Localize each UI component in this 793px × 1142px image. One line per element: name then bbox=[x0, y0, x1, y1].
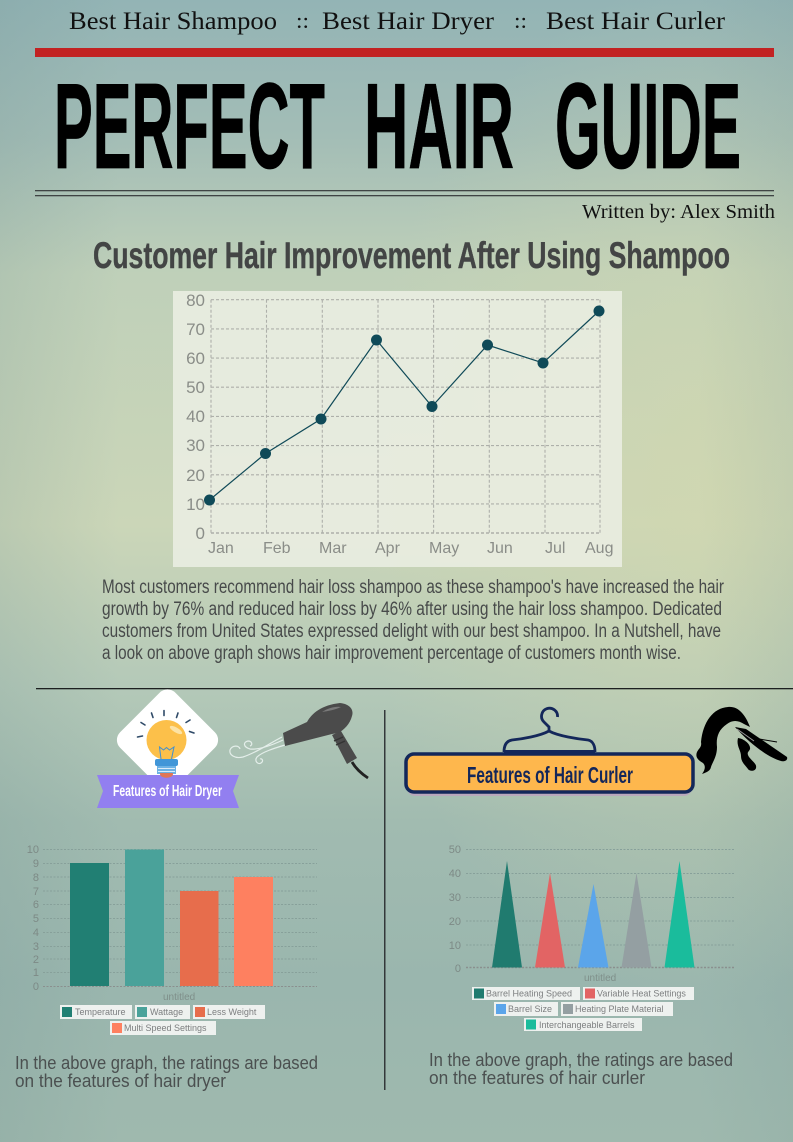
dryer y axis labels: 8 bbox=[33, 872, 39, 884]
ribbon: features of hair dryer bbox=[97, 775, 239, 808]
x axis labels: May bbox=[429, 540, 459, 557]
curler y axis labels: 40 bbox=[449, 868, 461, 880]
top navigation: Best Hair Shampoo bbox=[69, 8, 277, 35]
curler legend: Barrel Size bbox=[508, 1004, 552, 1014]
dryer y axis labels: 4 bbox=[33, 927, 39, 939]
dryer legend: Multi Speed Settings bbox=[124, 1023, 207, 1033]
x axis labels: Apr bbox=[375, 540, 401, 557]
x axis labels bbox=[208, 540, 613, 557]
dryer legend bbox=[60, 1005, 265, 1035]
curler triangles bbox=[492, 861, 694, 968]
curler y axis labels: 0 bbox=[455, 963, 461, 975]
curler legend: Barrel Heating Speed bbox=[486, 988, 572, 998]
main title: HAIR bbox=[364, 58, 514, 194]
dryer y axis labels: 9 bbox=[33, 858, 39, 870]
x axis labels: Jun bbox=[487, 540, 513, 557]
dryer y axis labels: 7 bbox=[33, 886, 39, 898]
dryer y axis labels: 1 bbox=[33, 967, 39, 979]
top navigation: Best Hair Curler bbox=[546, 8, 726, 35]
dryer legend: Temperature bbox=[75, 1007, 126, 1017]
byline: Written by: Alex Smith bbox=[582, 201, 775, 223]
dryer note bbox=[15, 1053, 318, 1091]
data points bbox=[204, 306, 604, 506]
y axis labels: 20 bbox=[186, 466, 205, 485]
icon: hair curler silhouette bbox=[696, 707, 787, 774]
dryer y axis labels: 3 bbox=[33, 941, 39, 953]
x axis labels: Mar bbox=[319, 540, 347, 557]
dryer legend: Wattage bbox=[150, 1007, 183, 1017]
curler legend bbox=[472, 987, 694, 1031]
dryer note: on the features of hair dryer bbox=[15, 1071, 226, 1091]
dryer y axis labels: 5 bbox=[33, 913, 39, 925]
curler legend: Interchangeable Barrels bbox=[539, 1020, 635, 1030]
curler axis title: untitled bbox=[584, 973, 616, 984]
dryer y axis labels bbox=[27, 844, 39, 993]
dryer y axis labels: 2 bbox=[33, 954, 39, 966]
dryer y axis labels: 6 bbox=[33, 899, 39, 911]
ribbon: features of hair dryer: Features of Hair Dryer bbox=[113, 783, 222, 800]
chart gridlines bbox=[211, 300, 600, 533]
dryer gridlines bbox=[43, 850, 317, 986]
x axis labels: Jul bbox=[545, 540, 565, 557]
badge backing diamond bbox=[112, 685, 223, 795]
dryer axis title: untitled bbox=[163, 992, 195, 1003]
curler y axis labels: 50 bbox=[449, 844, 461, 856]
bar chart: hair dryer bbox=[27, 844, 317, 1035]
main title: PERFECT bbox=[54, 58, 325, 194]
y axis labels bbox=[186, 291, 205, 543]
y axis labels: 60 bbox=[186, 349, 205, 368]
dryer bars bbox=[70, 850, 273, 986]
icon: hair dryer bbox=[230, 703, 368, 778]
description paragraph bbox=[102, 577, 725, 664]
icon: light bulb bbox=[138, 710, 194, 778]
red banner rule bbox=[35, 48, 774, 57]
curler y axis labels: 20 bbox=[449, 916, 461, 928]
curler y axis labels: 10 bbox=[449, 940, 461, 952]
curler note bbox=[429, 1050, 733, 1088]
y axis labels: 50 bbox=[186, 378, 205, 397]
y axis labels: 10 bbox=[186, 495, 205, 514]
curler note: In the above graph, the ratings are based bbox=[429, 1050, 733, 1070]
curler gridlines bbox=[466, 850, 735, 968]
y axis labels: 40 bbox=[186, 407, 205, 426]
x axis labels: Aug bbox=[585, 540, 613, 557]
y axis labels: 30 bbox=[186, 436, 205, 455]
curler note: on the features of hair curler bbox=[429, 1068, 645, 1088]
y axis labels: 0 bbox=[196, 524, 205, 543]
x axis labels: Jan bbox=[208, 540, 234, 557]
curler y axis labels bbox=[449, 844, 461, 975]
dryer legend: Less Weight bbox=[207, 1007, 257, 1017]
column divider bbox=[384, 710, 386, 1090]
x axis labels: Feb bbox=[263, 540, 291, 557]
line chart panel bbox=[173, 291, 622, 567]
curler legend: Variable Heat Settings bbox=[597, 988, 686, 998]
triangle chart: hair curler bbox=[449, 844, 735, 1031]
dryer y axis labels: 10 bbox=[27, 844, 39, 856]
dryer note: In the above graph, the ratings are based bbox=[15, 1053, 318, 1073]
double rule bbox=[35, 190, 774, 196]
y axis labels: 70 bbox=[186, 320, 205, 339]
data line bbox=[210, 311, 599, 500]
top navigation: Best Hair Dryer bbox=[322, 8, 495, 35]
banner: features of hair curler bbox=[406, 754, 693, 796]
dryer y axis labels: 0 bbox=[33, 981, 39, 993]
icon: hanger bbox=[504, 708, 595, 752]
top navigation bbox=[69, 8, 726, 35]
banner: features of hair curler: Features of Hair Curler bbox=[467, 762, 633, 788]
section divider bbox=[36, 688, 793, 689]
y axis labels: 80 bbox=[186, 291, 205, 310]
curler y axis labels: 30 bbox=[449, 892, 461, 904]
top navigation: :: bbox=[514, 8, 527, 33]
top navigation: :: bbox=[296, 8, 309, 33]
curler legend: Heating Plate Material bbox=[575, 1004, 664, 1014]
